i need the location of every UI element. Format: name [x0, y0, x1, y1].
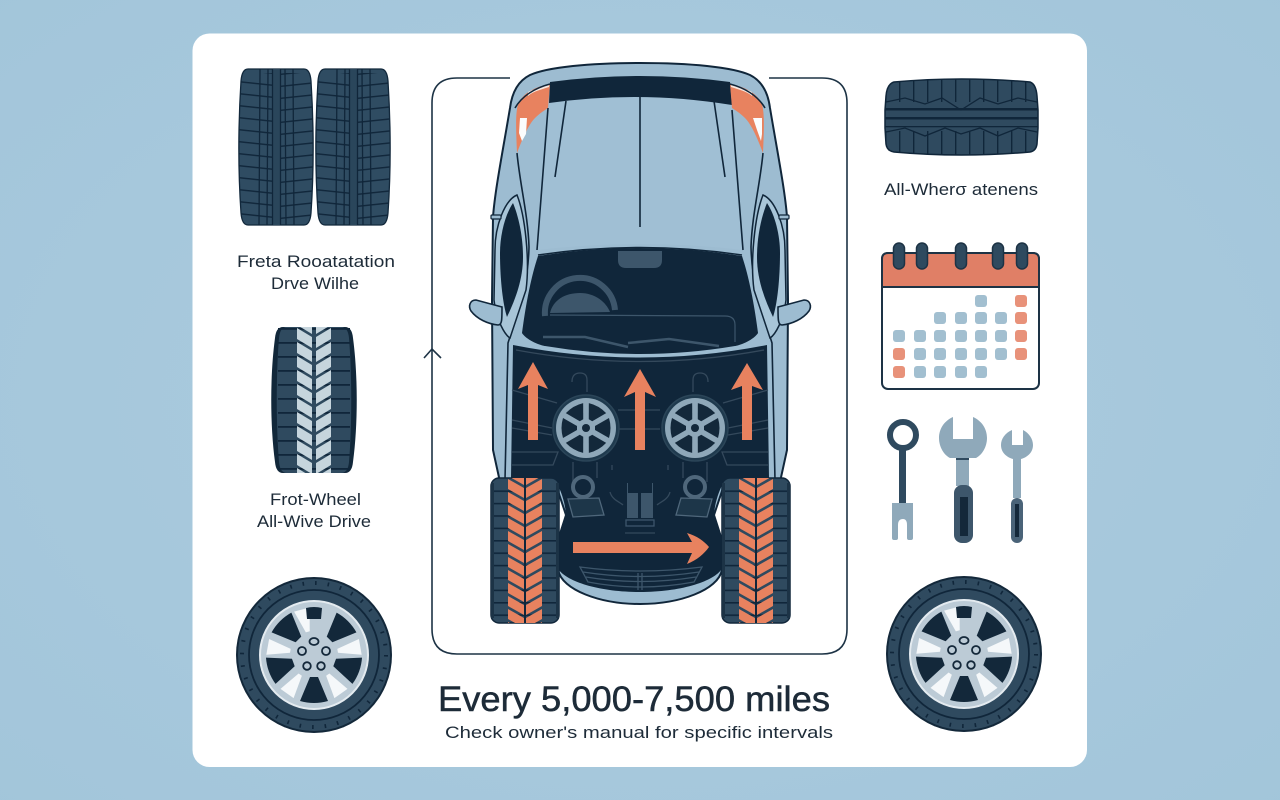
steering wheel: [545, 278, 615, 316]
rear window band: [549, 76, 732, 105]
engine block: [626, 483, 654, 526]
large wrench: [939, 417, 987, 543]
icon: tools: [890, 417, 1033, 543]
left side window: [494, 195, 527, 338]
rearview mirror: [618, 251, 662, 268]
right side window: [753, 195, 786, 338]
dashboard and wipers: [543, 315, 735, 347]
left mirror: [470, 300, 502, 325]
hood dark area: [511, 345, 769, 592]
rotation arrow: horizontal: [573, 533, 709, 564]
icon: left alloy wheel: [236, 577, 392, 733]
car top view: [470, 63, 810, 623]
rotation arrow: left up: [518, 362, 548, 440]
label: drive type: [257, 490, 371, 531]
windshield: [522, 248, 758, 354]
rear windshield edge: [538, 248, 742, 255]
label: drive type: All-Wive Drive: [257, 512, 371, 531]
tread illustration: all-weather tire: [885, 78, 1038, 157]
headlamp shapes: [568, 498, 712, 517]
front grille: [580, 567, 702, 590]
label: front rotation: [237, 252, 395, 293]
tread illustration: front rotation tires: [239, 69, 391, 225]
icon: calendar: [882, 243, 1039, 389]
rotation arrow: right up: [731, 363, 763, 440]
hood inner details: [512, 350, 768, 533]
door handles: [491, 215, 789, 219]
body lines: [505, 84, 775, 480]
heading: rotation interval: Every 5,000-7,500 miles: [438, 680, 830, 719]
right mirror: [778, 300, 810, 325]
label: front rotation: Freta Rooatatation: [237, 252, 395, 271]
fog rings: [573, 477, 705, 497]
left tail light: [516, 84, 550, 153]
panel: white card: [192, 34, 1087, 767]
front left tire with orange tread: [491, 478, 559, 623]
caption: manual note: Check owner's manual for specific intervals: [445, 723, 833, 742]
small wrench: [1001, 430, 1033, 543]
front right tire with orange tread: [722, 478, 790, 623]
middle axle wheels: [553, 395, 728, 461]
roof and rear glass: [537, 96, 743, 250]
car body: [492, 63, 788, 604]
label: all-weather: All-Wherσ atenens: [884, 180, 1038, 199]
label: drive type: Frot-Wheel: [270, 490, 361, 509]
icon: right alloy wheel: [886, 576, 1042, 732]
rotation arrow: centre up: [624, 369, 656, 450]
ring spanner: [890, 422, 916, 540]
rotation loop frame with arrowhead: [424, 78, 847, 654]
tread illustration: directional tire: [271, 327, 357, 473]
label: front rotation: Drve Wilhe: [271, 274, 359, 293]
right tail light: [730, 84, 764, 153]
